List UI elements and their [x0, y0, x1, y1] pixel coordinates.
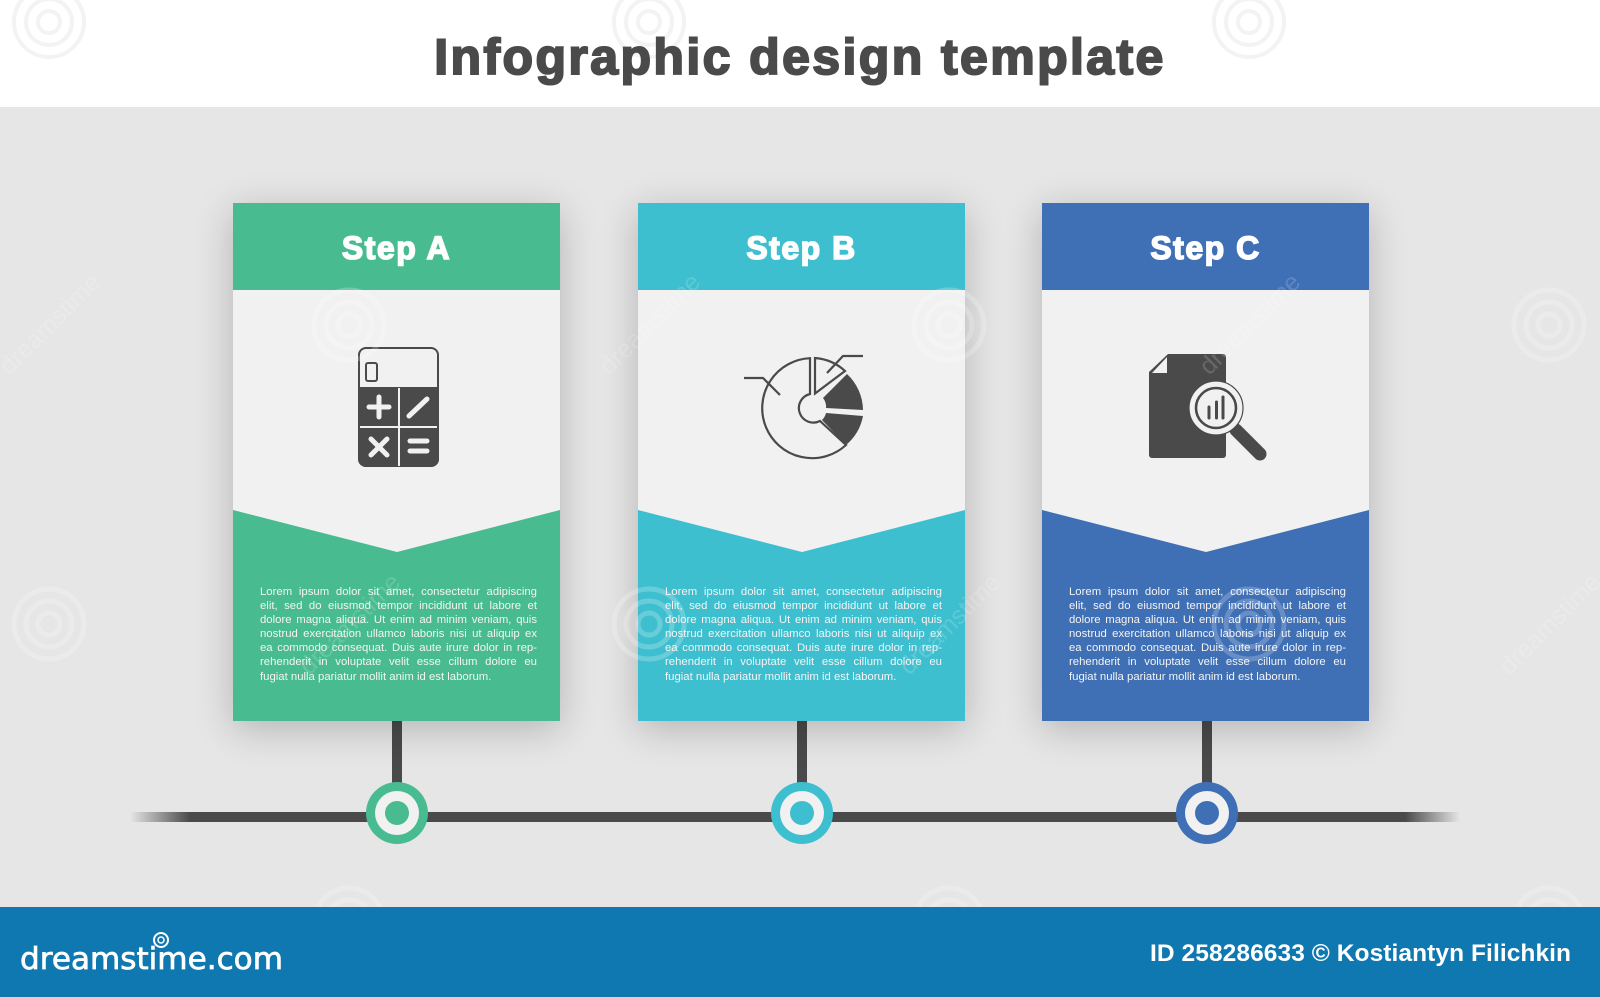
- timeline marker A: [366, 782, 428, 844]
- body text C: dolore magna aliqua. Ut enim ad minim veniam, quis: [1069, 614, 1346, 626]
- footer logo text: dreamstime.com: [20, 942, 283, 977]
- body text C: ea commodo consequat. Duis aute irure dolor in rep-: [1069, 642, 1346, 654]
- watermark text: dreamstime: [594, 268, 706, 380]
- body text A: rehenderit in voluptate velit esse cillum dolore eu: [260, 656, 537, 668]
- body text C: [1069, 586, 1346, 683]
- icon: calculator: [358, 347, 439, 467]
- body text B: dolore magna aliqua. Ut enim ad minim veniam, quis: [665, 614, 942, 626]
- body text C: fugiat nulla pariatur mollit anim id est laborum.: [1069, 671, 1300, 683]
- connector stem A: [392, 721, 402, 791]
- heading: Step C: Step C: [1150, 230, 1261, 266]
- footer bar: [0, 907, 1600, 997]
- body text C: nostrud exercitation ullamco laboris nisi ut aliquip ex: [1069, 628, 1346, 640]
- icon: pie chart: [744, 354, 863, 460]
- watermark text: dreamstime: [1194, 268, 1306, 380]
- body text B: rehenderit in voluptate velit esse cillum dolore eu: [665, 656, 942, 668]
- body text A: [260, 586, 537, 683]
- body text A: Lorem ipsum dolor sit amet, consectetur adipiscing: [260, 586, 537, 598]
- heading: Step A: Step A: [342, 230, 451, 266]
- body text C: rehenderit in voluptate velit esse cillum dolore eu: [1069, 656, 1346, 668]
- icon: document with magnifier: [1149, 354, 1266, 460]
- body text B: [665, 586, 942, 683]
- body text C: elit, sed do eiusmod tempor incididunt ut labore et: [1069, 600, 1346, 612]
- top row watermark spirals: [12, 0, 1286, 59]
- heading: Step B: Step B: [746, 230, 857, 266]
- body text A: nostrud exercitation ullamco laboris nisi ut aliquip ex: [260, 628, 537, 640]
- body text B: Lorem ipsum dolor sit amet, consectetur adipiscing: [665, 586, 942, 598]
- panel: step C: [1042, 203, 1369, 721]
- body text C: Lorem ipsum dolor sit amet, consectetur adipiscing: [1069, 586, 1346, 598]
- body text B: ea commodo consequat. Duis aute irure dolor in rep-: [665, 642, 942, 654]
- panel: step A: [233, 203, 560, 721]
- body text A: fugiat nulla pariatur mollit anim id est laborum.: [260, 671, 491, 683]
- body text A: elit, sed do eiusmod tempor incididunt ut labore et: [260, 600, 537, 612]
- connector stem C: [1202, 721, 1212, 791]
- timeline marker C: [1176, 782, 1238, 844]
- timeline axis: [130, 812, 1460, 822]
- connector stem B: [797, 721, 807, 791]
- panel: step B: [638, 203, 965, 721]
- body text B: fugiat nulla pariatur mollit anim id est laborum.: [665, 671, 896, 683]
- body text B: elit, sed do eiusmod tempor incididunt ut labore et: [665, 600, 942, 612]
- body text A: ea commodo consequat. Duis aute irure dolor in rep-: [260, 642, 537, 654]
- watermark text: dreamstime: [894, 568, 1006, 680]
- watermark text: dreamstime: [294, 568, 406, 680]
- timeline marker B: [771, 782, 833, 844]
- body text B: nostrud exercitation ullamco laboris nisi ut aliquip ex: [665, 628, 942, 640]
- title: Infographic design template: [434, 29, 1166, 85]
- footer credit: ID 258286633 © Kostiantyn Filichkin: [1150, 940, 1571, 967]
- body text A: dolore magna aliqua. Ut enim ad minim veniam, quis: [260, 614, 537, 626]
